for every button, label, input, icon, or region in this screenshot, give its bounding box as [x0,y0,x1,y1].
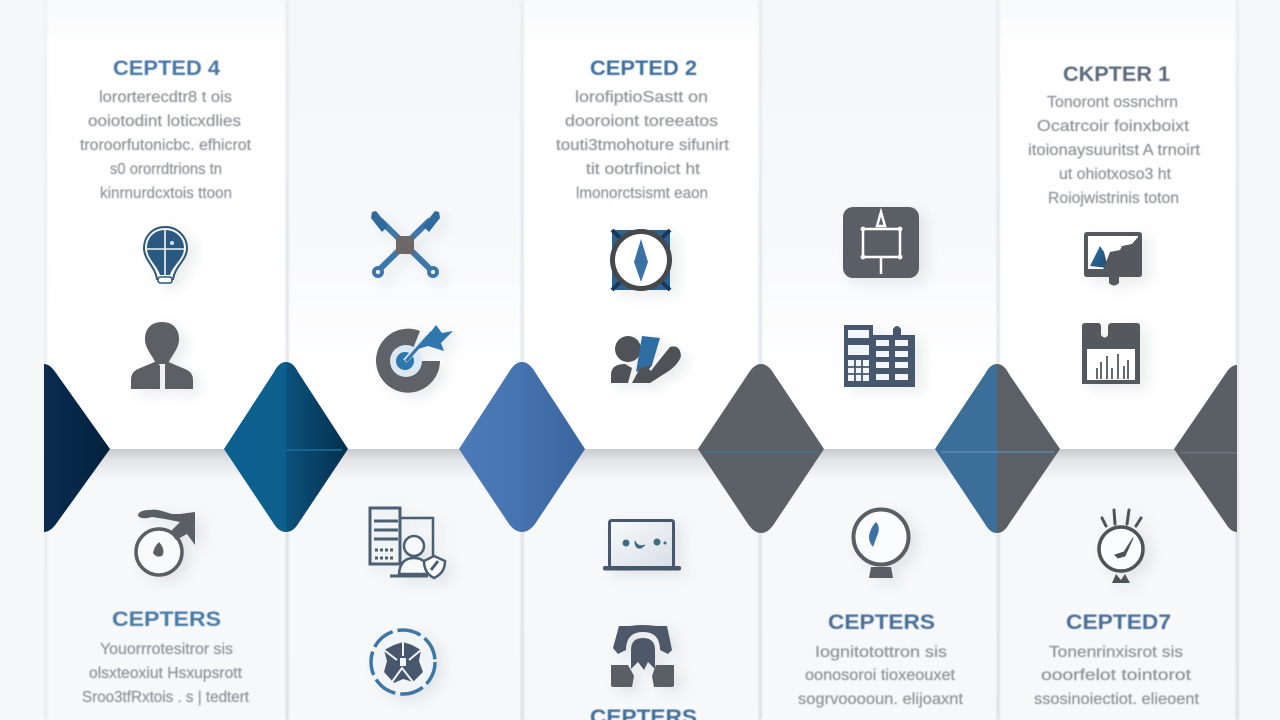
panel: top column 5 [998,0,1237,449]
text block: column 5 top [1028,94,1201,207]
icon: person [131,322,193,389]
icon: dashed gear ring [371,630,435,694]
band shadow [46,449,1237,481]
text block: column 1 top [80,89,252,202]
text block: column 5 bottom: ssosinoiectiot. elieoent [1034,691,1200,708]
icon: gauge with arrow [136,510,195,575]
diamond: 1 [224,362,348,532]
icon: chart card [1082,323,1140,384]
text block: column 3 top [556,89,730,202]
icon: picture frame [1084,232,1142,286]
text block: column 4 bottom: oonosoroi tioxeouxet [805,667,956,684]
icon: laptop [603,520,681,570]
icon: calculator table [844,325,915,387]
text block: column 1 top: kinrnurdcxtois ttoon [100,185,232,202]
panel: top column 1 [46,0,287,449]
heading: column 5 bottom: CEPTED7 [1066,611,1171,634]
text block: column 5 top: ut ohiotxoso3 ht [1059,166,1172,183]
text block: column 3 top: lmonorctsismt eaon [576,185,708,202]
icon: headset [611,625,674,687]
text block: column 4 bottom: Iognitotottron sis [815,644,947,661]
heading: column 1 bottom: CEPTERS [112,608,221,631]
text block: column 1 bottom [82,641,250,706]
text block: column 1 bottom: Youorrrotesitror sis [100,641,233,658]
text block: column 5 top: itoionaysuuritst A trnoirt [1028,142,1201,159]
text block: column 5 bottom [1034,644,1200,708]
text block: column 3 top: tit ootrfinoict ht [586,161,701,178]
text block: column 5 top: Roiojwistrinis toton [1048,190,1179,207]
heading: column 5 top: CKPTER 1 [1063,63,1170,86]
icon: crossed wrenches [371,211,440,278]
text block: column 1 top: troroorfutonicbc. efhicrot [80,137,252,154]
text block: column 3 top: dooroiont toreeatos [565,113,718,130]
text block: column 4 bottom: sogrvooooun. elijoaxnt [798,691,964,708]
text block: column 4 bottom [798,644,964,708]
text block: column 1 top: ooiotodint loticxdlies [88,113,241,130]
icon: mirror [854,510,908,578]
icon: compass [610,229,672,291]
panel: top column 3 [522,0,760,449]
text block: column 5 top: Ocatrcoir foinxboixt [1037,118,1190,135]
icon: light bulb [144,227,187,283]
heading: column 1 top: CEPTED 4 [113,57,220,80]
icon: framed square [843,207,919,278]
panel: top column 2 [287,0,522,449]
text block: column 1 bottom: Sroo3tfRxtois . s | tedtert [82,689,250,706]
text block: column 1 top: s0 ororrdtrions tn [110,161,222,178]
panel: bottom band [46,449,1237,720]
diamond: 2 [459,362,585,532]
text block: column 1 bottom: olsxteoxiut Hsxupsrott [89,665,243,682]
text block: column 5 bottom: Tonenrinxisrot sis [1049,644,1183,661]
icon: helping hands [611,336,681,383]
diamond: 4 [935,364,1060,533]
diamond: right half [1174,365,1237,532]
text block: column 3 top: lorofiptioSastt on [575,89,708,106]
text block: column 3 top: touti3tmohoture sifunirt [556,137,730,154]
diamond: left half [44,364,110,532]
text block: column 1 top: lororterecdtr8 t ois [99,89,232,106]
icon: document and user [370,508,445,578]
icon: stopwatch bulb [1099,510,1143,583]
heading: column 3 top: CEPTED 2 [590,57,697,80]
text block: column 5 top: Tonoront ossnchrn [1047,94,1178,111]
icon: target with dart [376,325,453,393]
diamond: 3 [698,364,824,533]
text block: column 5 bottom: ooorfelot tointorot [1041,667,1192,684]
heading: column 4 bottom: CEPTERS [828,611,935,634]
panel: top column 4 [760,0,998,449]
